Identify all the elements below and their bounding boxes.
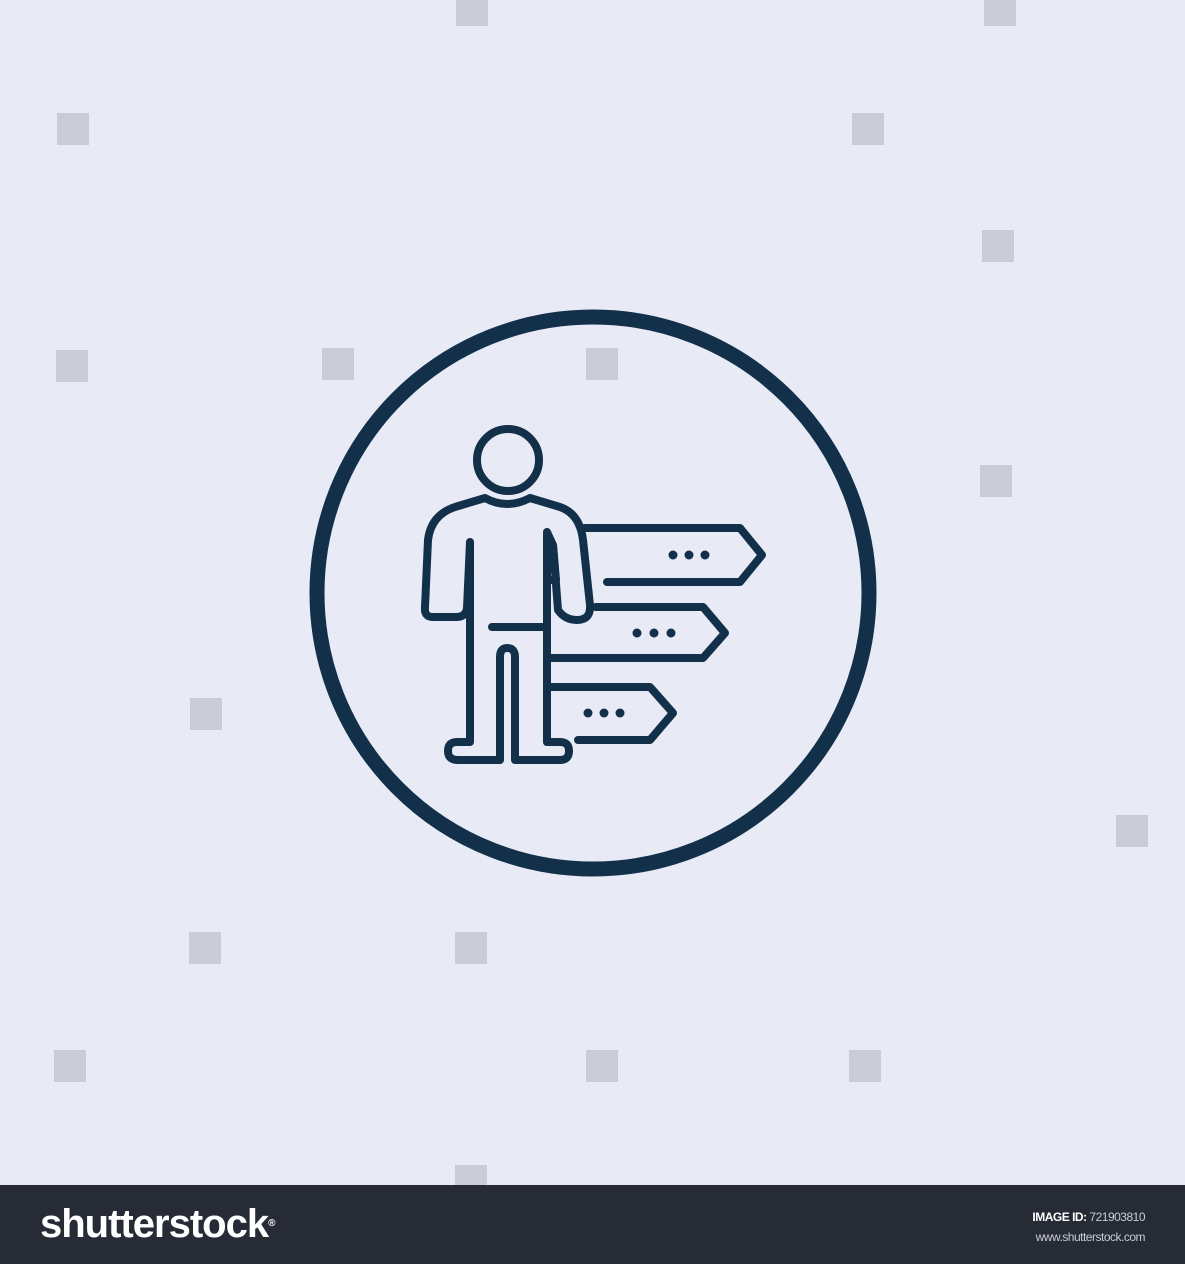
person xyxy=(425,429,590,760)
footer image id xyxy=(1032,1210,1146,1244)
footer xyxy=(0,1185,1185,1264)
footer image id: IMAGE ID: 721903810 xyxy=(1032,1210,1145,1224)
footer logo: shutterstock® xyxy=(40,1202,274,1246)
footer image id: www.shutterstock.com xyxy=(1036,1230,1145,1244)
outer circle xyxy=(317,317,869,869)
signs xyxy=(550,528,762,740)
dots xyxy=(584,550,710,718)
